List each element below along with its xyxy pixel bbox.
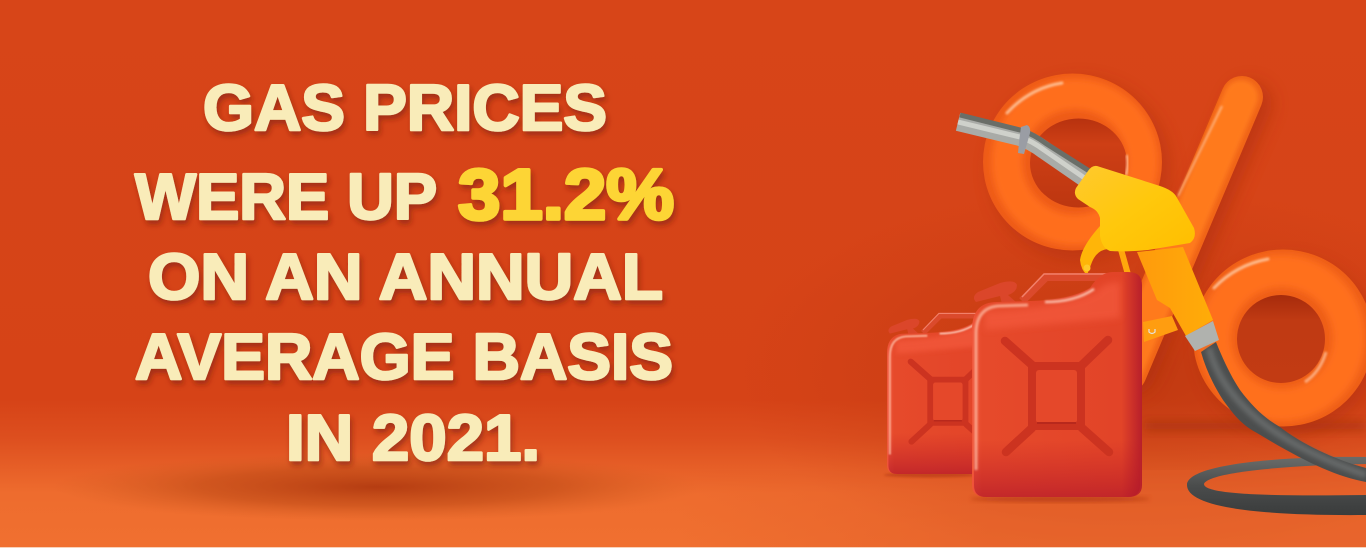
percent bottom ring [1193, 250, 1366, 426]
percent symbol [983, 74, 1366, 426]
jerry can front [970, 272, 1150, 502]
wall-floor shadow band [1145, 422, 1366, 430]
line 2: WERE UP [135, 161, 437, 233]
nozzle grip [1137, 247, 1213, 336]
hose rising to nozzle [1201, 342, 1366, 482]
nozzle body [1075, 166, 1195, 251]
nozzle spout [958, 115, 1090, 179]
right floor tone [680, 470, 1366, 547]
coiled hose on the floor [1187, 457, 1366, 515]
hose highlight [1209, 348, 1366, 475]
wall shading behind illustration [730, 180, 1366, 548]
line 5: IN 2021. [286, 402, 540, 474]
nozzle trigger guard [1080, 226, 1178, 342]
floor shadow under text [53, 453, 703, 521]
percent top ring [983, 74, 1162, 250]
jerry can back [884, 312, 1009, 478]
spout collar [1018, 125, 1030, 154]
fuel hose [1187, 342, 1366, 515]
line 1: GAS PRICES [203, 72, 607, 144]
percent slash [1125, 97, 1250, 372]
highlighted figure 31.2%: 31.2% [458, 156, 674, 235]
line 3: ON AN ANNUAL [148, 241, 663, 313]
metal hose collar [1185, 321, 1219, 351]
fuel nozzle [958, 115, 1219, 351]
line 4: AVERAGE BASIS [135, 321, 673, 393]
bottom edge [0, 547, 1366, 548]
headline text [135, 72, 674, 474]
